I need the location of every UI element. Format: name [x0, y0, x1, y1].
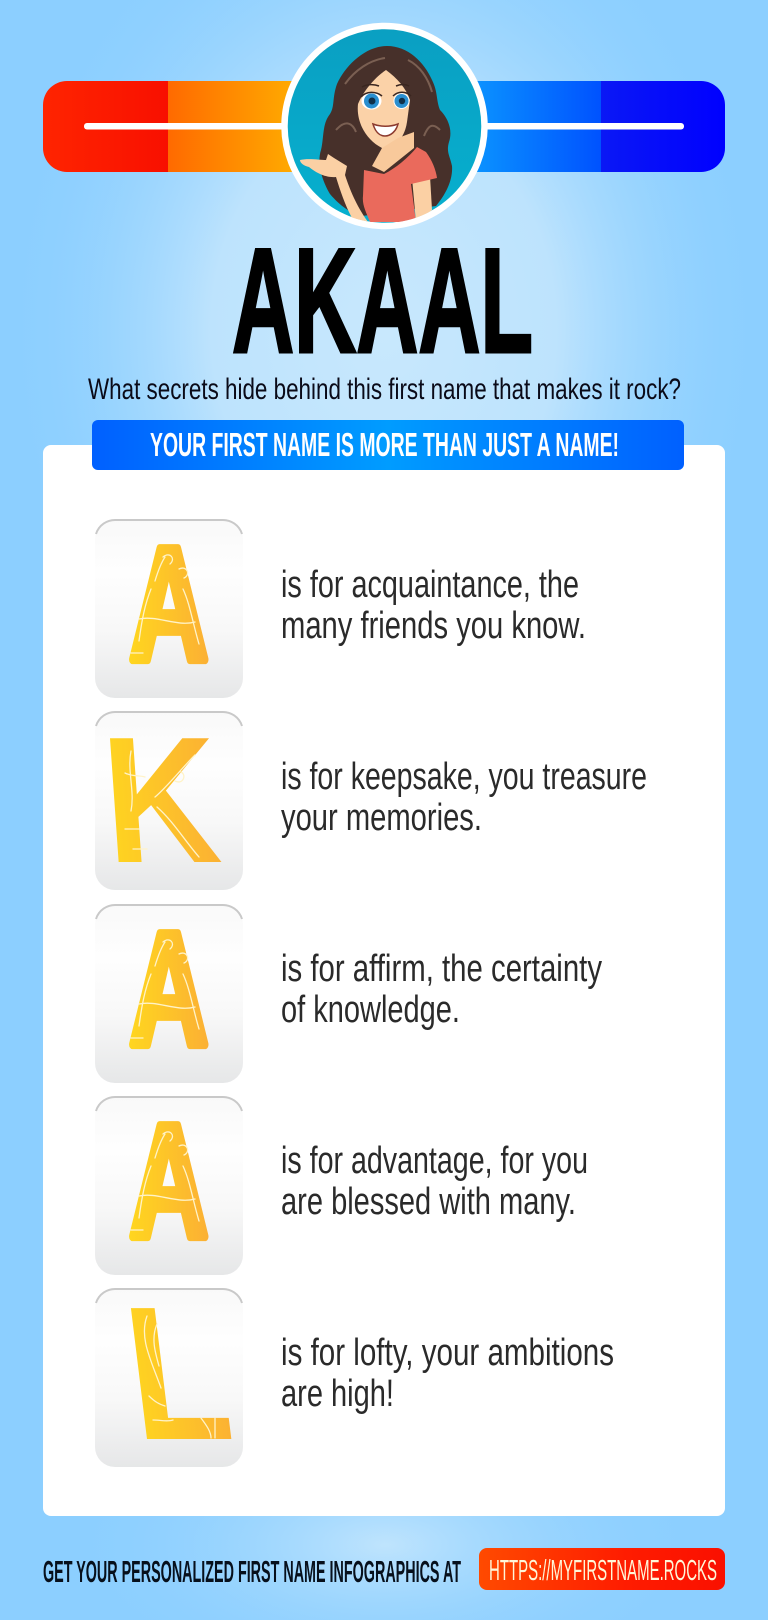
- letter tile A: A: [130, 900, 208, 1080]
- caption: [281, 1140, 588, 1223]
- letter tile A: A: [130, 1092, 208, 1272]
- letter tile A: [95, 1092, 243, 1275]
- neck: [372, 132, 414, 172]
- caption: [281, 564, 586, 647]
- arms and hand: [300, 154, 368, 222]
- caption: is for advantage, for you: [281, 1140, 588, 1182]
- caption: of knowledge.: [281, 989, 460, 1031]
- caption: [281, 756, 647, 839]
- caption: [281, 948, 602, 1031]
- letter tile A: A: [130, 515, 208, 695]
- letter row: A affirm: [95, 900, 602, 1083]
- eyes: [361, 84, 411, 110]
- letter tile L: L: [115, 1266, 241, 1479]
- caption: is for acquaintance, the: [281, 564, 579, 606]
- letter tile K: K: [97, 700, 226, 901]
- banner: [92, 420, 684, 470]
- colour bar header: [43, 81, 725, 172]
- caption: is for lofty, your ambitions: [281, 1332, 614, 1374]
- hair: [319, 46, 452, 216]
- caption: [281, 1332, 614, 1415]
- face: [358, 70, 410, 148]
- letter row: A advantage: [95, 1092, 588, 1275]
- letter tile A: [95, 900, 243, 1083]
- caption: is for keepsake, you treasure: [281, 756, 647, 798]
- letter row: K keepsake: [95, 700, 647, 901]
- letter row: L lofty: [95, 1266, 614, 1479]
- white content panel: [43, 445, 725, 1516]
- smile: [373, 124, 398, 136]
- title: AKAAL: [232, 217, 533, 384]
- letter tile A: [95, 515, 243, 698]
- caption: many friends you know.: [281, 605, 586, 647]
- letter row: A acquaintance: [95, 515, 586, 698]
- caption: are blessed with many.: [281, 1181, 576, 1223]
- caption: are high!: [281, 1373, 394, 1415]
- caption: your memories.: [281, 797, 482, 839]
- shirt: [363, 147, 437, 222]
- caption: is for affirm, the certainty: [281, 948, 602, 990]
- footer url button: [479, 1548, 725, 1590]
- portrait: woman in circle: [284, 26, 484, 226]
